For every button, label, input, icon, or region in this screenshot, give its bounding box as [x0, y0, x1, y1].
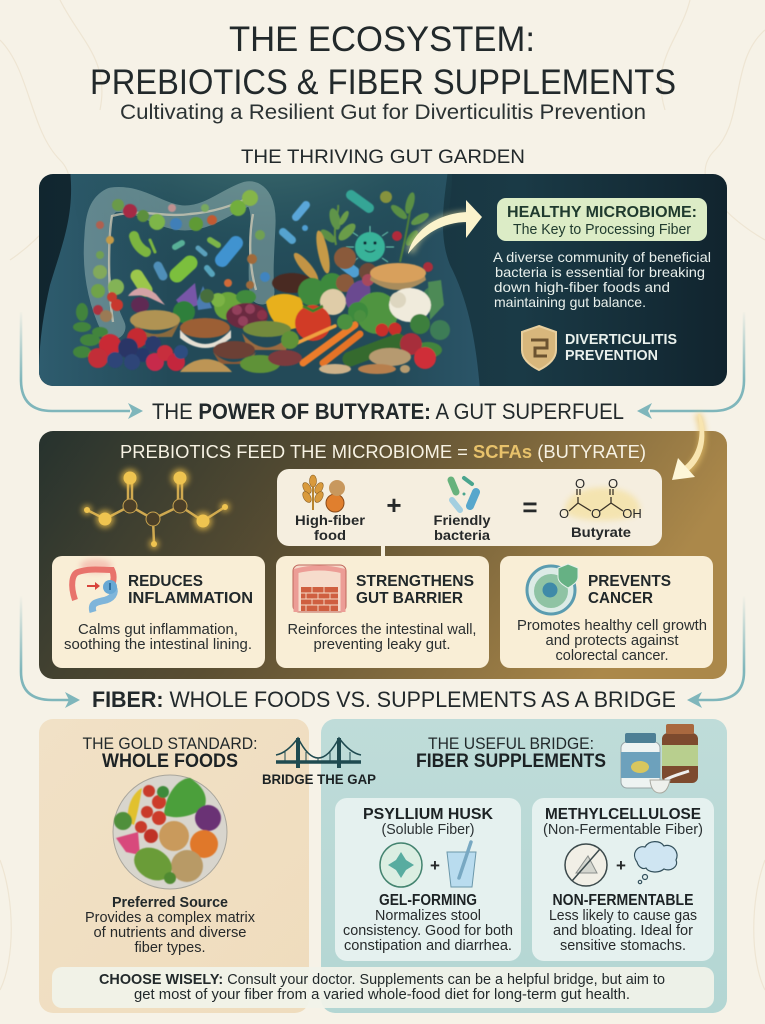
molecule: glowing butyrate [82, 469, 230, 549]
text: reduces inflammation heading: INFLAMMATION [128, 590, 253, 607]
heading: useful bridge: THE USEFUL BRIDGE: [428, 734, 594, 753]
text: psyllium body: constipation and diarrhea. [344, 937, 512, 954]
label: healthy microbiome: HEALTHY MICROBIOME: [507, 204, 697, 221]
text: butyrate: Butyrate [571, 524, 631, 540]
text: reduces inflammation heading [128, 573, 253, 607]
icon: butyrate structure: O [608, 476, 618, 491]
text: strengthens heading: GUT BARRIER [356, 590, 463, 607]
icon: butyrate structure: O [559, 506, 569, 521]
text: strengthens heading [356, 573, 474, 607]
text: microbiome description: bacteria is essential for breaking [495, 264, 705, 280]
icon: friendly bacteria [451, 478, 476, 510]
heading: fiber whole foods vs supplements: FIBER: WHOLE FOODS VS. SUPPLEMENTS AS A BRIDGE [92, 687, 676, 712]
text: reduces inflammation body [64, 622, 252, 653]
text: prevents body [517, 618, 707, 664]
text: diverticulitis prevention: PREVENTION [565, 348, 658, 364]
label: healthy microbiome: The Key to Processing Fiber [513, 222, 691, 238]
card: reduces inflammation [52, 556, 265, 668]
flow arrows: upper [21, 312, 744, 419]
heading: prebiotics feed the microbiome: PREBIOTICS FEED THE MICROBIOME = SCFAs (BUTYRATE) [120, 441, 646, 462]
text: strengthens body: preventing leaky gut. [314, 637, 450, 653]
text: prevents body: Promotes healthy cell growth [517, 618, 707, 634]
flow arrows: lower [21, 596, 744, 708]
text: strengthens body [288, 622, 476, 653]
illustration: produce and grains pile [73, 263, 450, 374]
text: methylcellulose body: and bloating. Ideal for [553, 922, 693, 939]
text: preferred source: Preferred Source [112, 894, 228, 911]
callout: choose wisely [52, 967, 714, 1008]
heading: the thriving gut garden: THE THRIVING GUT GARDEN [241, 147, 525, 168]
card: prevents cancer [500, 556, 713, 668]
text: whole foods body: Provides a complex matrix [85, 909, 255, 926]
title: PREBIOTICS & FIBER SUPPLEMENTS [90, 63, 676, 102]
text: psyllium subtitle: (Soluble Fiber) [382, 821, 475, 838]
text: psyllium body: consistency. Good for both [343, 922, 513, 939]
symbol: equals: = [522, 492, 538, 522]
illustration: bacteria [134, 195, 369, 290]
icon: water glass with spoon [447, 842, 476, 887]
subtitle: Cultivating a Resilient Gut for Diverticulitis Prevention [120, 101, 646, 124]
text: non-fermentable: NON-FERMENTABLE [552, 892, 694, 909]
icon: butyrate structure: O [575, 476, 585, 491]
text: prevents body: and protects against [546, 633, 678, 649]
illustration: smiling microbe [346, 226, 394, 262]
text: methylcellulose subtitle: (Non-Fermentable Fiber) [543, 821, 703, 838]
icon: inflamed colon [72, 559, 117, 612]
text: methylcellulose body: Less likely to cause gas [549, 907, 697, 924]
panel: thriving gut garden [39, 174, 727, 386]
text: whole foods body: fiber types. [134, 939, 206, 956]
text: friendly bacteria: Friendly [434, 512, 491, 528]
illustration: gut garden scene [39, 174, 480, 386]
text: whole foods body [85, 909, 255, 956]
text: prevents body: colorectal cancer. [556, 648, 668, 664]
formula box [277, 469, 662, 546]
heading: gold standard: THE GOLD STANDARD: [82, 734, 258, 753]
illustration: supplement jars [621, 724, 698, 793]
text: friendly bacteria: bacteria [434, 527, 490, 543]
label: healthy microbiome [497, 198, 707, 241]
card: strengthens gut barrier [276, 556, 489, 668]
card: psyllium husk [335, 798, 521, 961]
text: friendly bacteria [434, 512, 491, 543]
callout: choose wisely: CHOOSE WISELY: Consult your doctor. Supplements can be a helpful bridge, but aim to [99, 971, 665, 988]
heading: fiber supplements: FIBER SUPPLEMENTS [416, 751, 606, 772]
icon: bridge [276, 738, 361, 768]
text: high-fiber food: food [314, 527, 346, 543]
card: methylcellulose [532, 798, 714, 961]
icon: plus: + [616, 856, 626, 875]
text: psyllium body [343, 907, 513, 954]
label: bridge the gap: BRIDGE THE GAP [262, 772, 376, 787]
text: prevents heading: PREVENTS [588, 573, 671, 590]
icon: brick barrier [293, 565, 346, 612]
text: diverticulitis prevention [565, 332, 677, 364]
text: methylcellulose body [549, 907, 697, 954]
heading: the power of butyrate: THE POWER OF BUTYRATE: A GUT SUPERFUEL [152, 399, 624, 424]
text: microbiome description: maintaining gut balance. [494, 294, 646, 310]
symbol: plus: + [386, 490, 402, 520]
text: reduces inflammation heading: REDUCES [128, 573, 203, 590]
icon: butyrate structure [559, 476, 642, 521]
callout: choose wisely: get most of your fiber from a varied whole-food diet for long-term gut health. [134, 986, 630, 1003]
title [90, 20, 676, 102]
text: high-fiber food [295, 512, 366, 543]
text: high-fiber food: High-fiber [295, 512, 366, 528]
text: microbiome description: A diverse community of beneficial [493, 249, 711, 265]
icon: no fermentation [565, 844, 607, 886]
text: strengthens body: Reinforces the intestinal wall, [288, 622, 476, 638]
illustration: plants [291, 191, 433, 284]
icon: high-fiber food [301, 475, 345, 512]
icon: shield [522, 326, 556, 370]
text: prevents heading [588, 573, 671, 607]
text: whole foods body: of nutrients and diverse [94, 924, 246, 941]
icon: protected cell [527, 564, 578, 614]
arrow: glowing curve [408, 200, 482, 254]
title: THE ECOSYSTEM: [229, 20, 535, 59]
icon: plus: + [430, 856, 440, 875]
icon: butyrate structure: OH [622, 506, 642, 521]
text: diverticulitis prevention: DIVERTICULITIS [565, 332, 677, 348]
panel: fiber supplements [321, 719, 727, 1013]
text: microbiome description: down high-fiber foods and [494, 279, 670, 295]
text: psyllium title: PSYLLIUM HUSK [363, 806, 493, 823]
heading: whole foods: WHOLE FOODS [102, 751, 238, 772]
arrow: gold curve [672, 414, 704, 480]
icon: gas cloud [635, 842, 677, 884]
illustration: colon [91, 190, 270, 327]
text: gel-forming: GEL-FORMING [379, 892, 477, 909]
text: methylcellulose title: METHYLCELLULOSE [545, 806, 701, 823]
panel: butyrate [39, 414, 727, 679]
panel: whole foods [39, 719, 309, 1013]
text: methylcellulose body: sensitive stomachs. [560, 937, 686, 954]
text: strengthens heading: STRENGTHENS [356, 573, 474, 590]
text: microbiome description [493, 249, 711, 310]
text: reduces inflammation body: soothing the intestinal lining. [64, 637, 252, 653]
text: psyllium body: Normalizes stool [375, 907, 481, 924]
icon: butyrate structure: O [591, 506, 601, 521]
illustration: salad plate [113, 775, 227, 889]
icon: gel [380, 843, 422, 887]
text: prevents heading: CANCER [588, 590, 653, 607]
text: reduces inflammation body: Calms gut inflammation, [78, 622, 238, 638]
